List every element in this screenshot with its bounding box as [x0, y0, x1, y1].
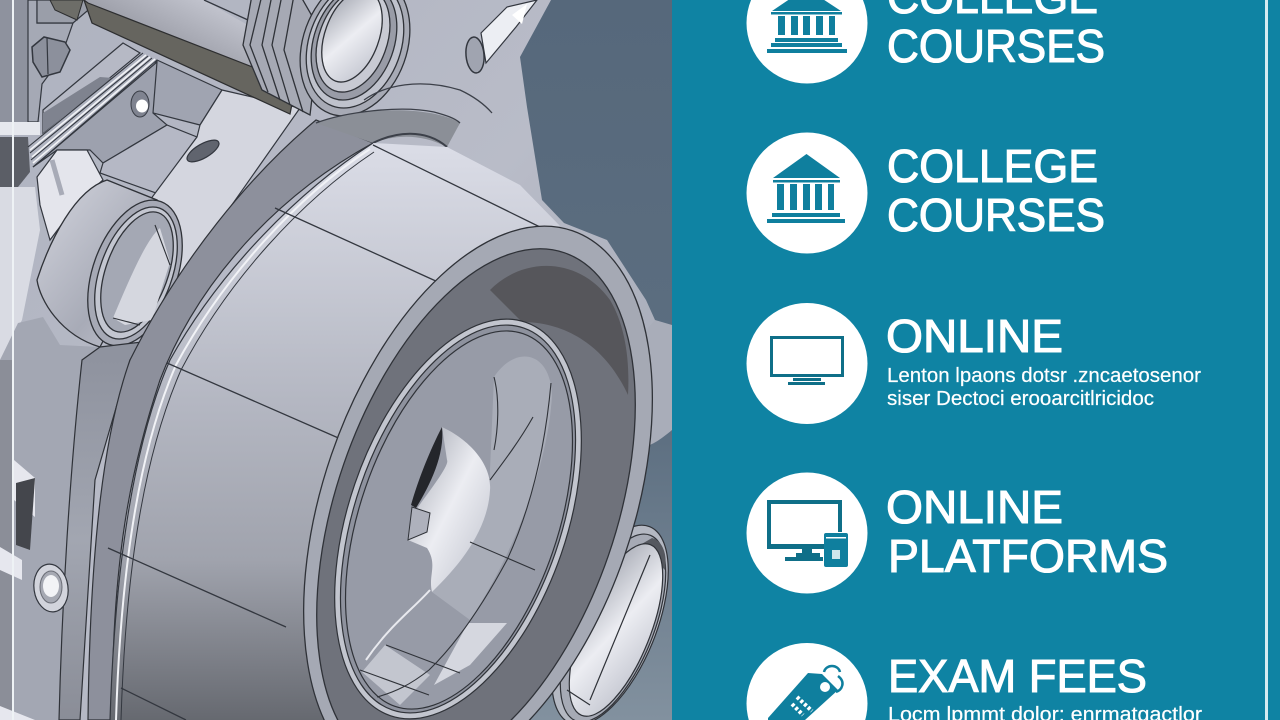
- left boss with bore: [37, 180, 200, 359]
- bolt head: [32, 37, 70, 77]
- heading: exam fees: EXAM FEES: [888, 650, 1147, 702]
- bolt on left band: [31, 562, 71, 614]
- heading: college courses: COURSES: [887, 20, 1105, 72]
- housing left detail: [0, 0, 300, 720]
- heading: online platforms: [886, 481, 1168, 582]
- heading: online: ONLINE: [886, 310, 1063, 362]
- panel: technical illustration: [0, 0, 719, 720]
- body text: [887, 365, 1201, 410]
- top arcs above drum: [316, 84, 492, 147]
- slot opening: [184, 136, 222, 166]
- side boss behind flange: [620, 320, 672, 447]
- icon: monitor and device: [746, 472, 868, 594]
- icon: price tag: [746, 643, 868, 720]
- bore lower lit band: [434, 623, 507, 685]
- item: college courses (cropped): [746, 0, 1105, 84]
- icon: monitor: [746, 303, 868, 424]
- item: online: [746, 303, 1201, 424]
- heading: college courses: COLLEGE: [887, 140, 1098, 192]
- top right lug: [464, 0, 537, 74]
- machine housing body: [0, 0, 655, 720]
- body text: siser Dectoci erooarcitlricidoc: [887, 388, 1154, 410]
- icon: institution building: [746, 0, 868, 84]
- left big ring: [88, 120, 373, 720]
- right frame line: [1265, 0, 1268, 720]
- bore right lit band: [432, 356, 552, 620]
- left outer band: [59, 342, 142, 720]
- drum highlight ring and seam lines: [108, 143, 540, 720]
- bore seam lines: [360, 377, 551, 697]
- heading: online platforms: PLATFORMS: [888, 530, 1168, 582]
- item: college courses: [746, 132, 1105, 254]
- bore light crescent: [408, 427, 490, 592]
- inner bore: [287, 287, 629, 720]
- item: online platforms: [746, 472, 1168, 594]
- icon: institution building: [746, 132, 868, 254]
- left frame line: [12, 0, 14, 720]
- small side ring lower right: [528, 509, 692, 720]
- upper cylinder end rings: [243, 0, 429, 131]
- bore dark slit: [411, 427, 442, 508]
- bore facet: [408, 507, 430, 540]
- front flange: [237, 180, 719, 720]
- teal panel background: [672, 0, 1280, 720]
- upper cylinder: [50, 0, 300, 114]
- main drum: [110, 143, 560, 720]
- body text: Lenton lpaons dotsr .zncaetosenor: [887, 365, 1201, 387]
- heading: college courses: COURSES: [887, 189, 1105, 241]
- heading: online platforms: ONLINE: [886, 481, 1063, 533]
- heading: college courses: [887, 140, 1105, 241]
- item: exam fees: [746, 643, 1202, 720]
- small bolt hole: [131, 91, 149, 117]
